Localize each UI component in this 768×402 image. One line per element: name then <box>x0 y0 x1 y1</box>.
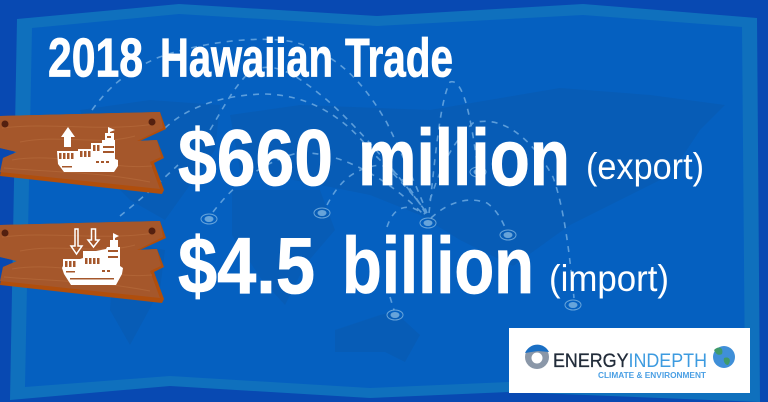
logo box <box>509 328 750 393</box>
logo tagline: CLIMATE & ENVIRONMENT <box>598 371 706 380</box>
icon: export ship <box>57 127 118 172</box>
export plank with ship icon <box>0 112 166 194</box>
title: Trade <box>345 26 453 88</box>
export value: million <box>358 113 570 202</box>
icon: logo swirl <box>525 345 549 369</box>
export label: (export) <box>586 146 704 187</box>
world map silhouette <box>80 88 725 362</box>
export value: $660 <box>178 113 333 202</box>
export value <box>178 113 570 202</box>
dashed trade routes <box>92 39 574 310</box>
import plank with ship icon <box>0 221 166 303</box>
location markers <box>201 167 581 320</box>
icon: import ship <box>62 229 123 285</box>
title: 2018 <box>48 26 143 88</box>
title <box>48 26 453 88</box>
title: Hawaiian <box>160 26 333 88</box>
import value <box>178 221 534 310</box>
import label: (import) <box>549 258 669 299</box>
plank: export <box>0 112 166 194</box>
logo wordmark: ENERGYINDEPTH <box>553 350 707 372</box>
plank: import <box>0 221 166 303</box>
import value: billion <box>342 221 534 310</box>
import value: $4.5 <box>178 221 315 310</box>
icon: globe <box>713 346 735 368</box>
